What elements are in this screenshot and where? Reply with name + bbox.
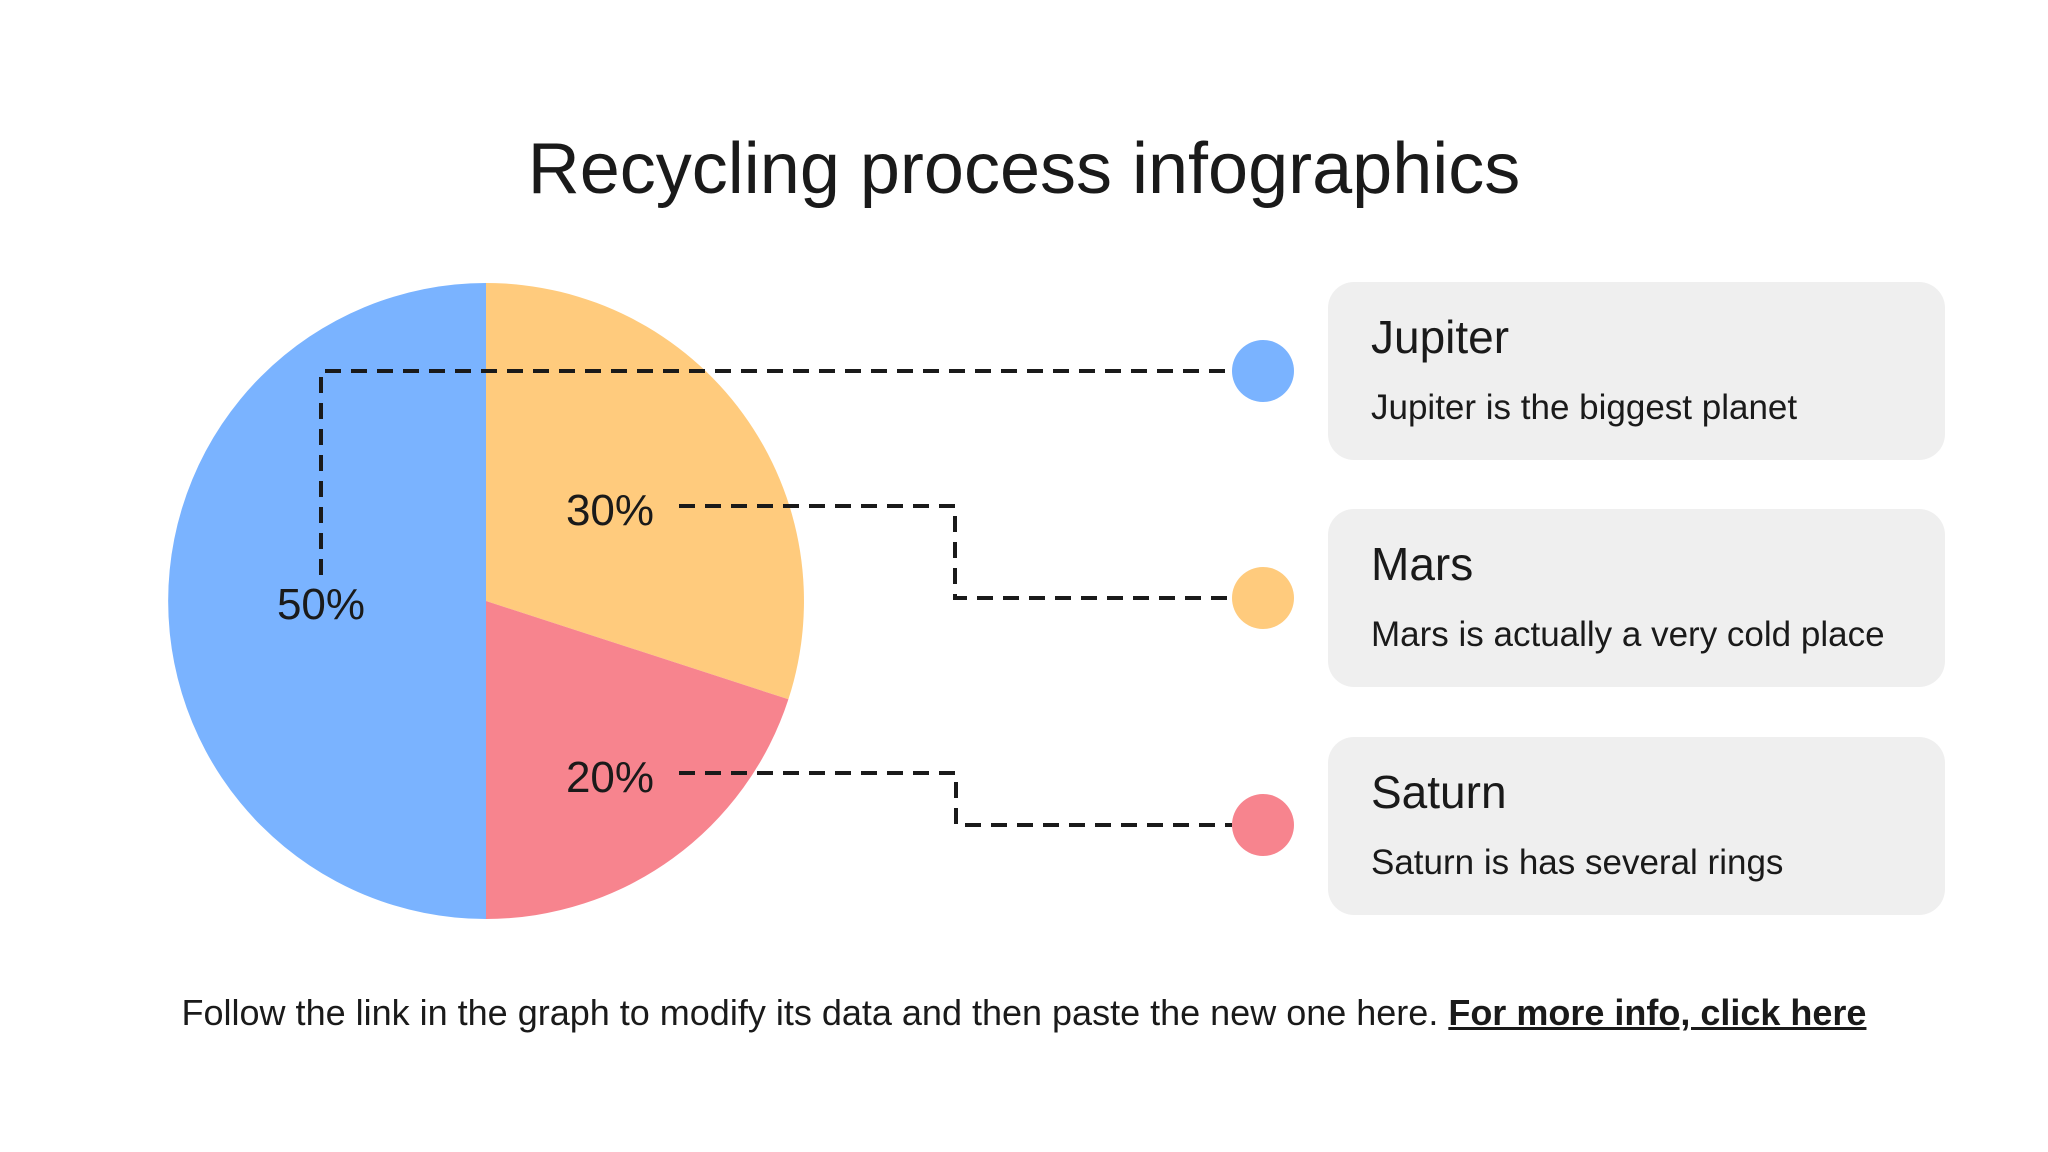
labels: 20% [566, 753, 654, 802]
card: Jupiter: Jupiter is the biggest planet [1371, 388, 1797, 427]
dots [1232, 340, 1294, 856]
slice: 30% yellow [486, 283, 804, 699]
card: Jupiter: Jupiter [1371, 311, 1509, 363]
title: Recycling process infographics [528, 129, 1520, 209]
labels: 50% [277, 580, 365, 629]
card: Jupiter [1328, 282, 1945, 460]
card: Mars: Mars [1371, 538, 1473, 590]
card: Mars [1328, 509, 1945, 687]
labels: 30% [566, 486, 654, 535]
connector lines [321, 371, 1232, 825]
card: Saturn [1328, 737, 1945, 915]
card: Saturn: Saturn [1371, 766, 1507, 818]
slice: 50% blue [168, 283, 486, 919]
labels [277, 486, 654, 802]
card: Mars: Mars is actually a very cold place [1371, 615, 1885, 654]
footer: Follow the link in the graph to modify its data and then paste the new one here. For more info, click here [182, 992, 1866, 1033]
card: Saturn: Saturn is has several rings [1371, 843, 1783, 882]
slice: 20% red [486, 601, 788, 919]
